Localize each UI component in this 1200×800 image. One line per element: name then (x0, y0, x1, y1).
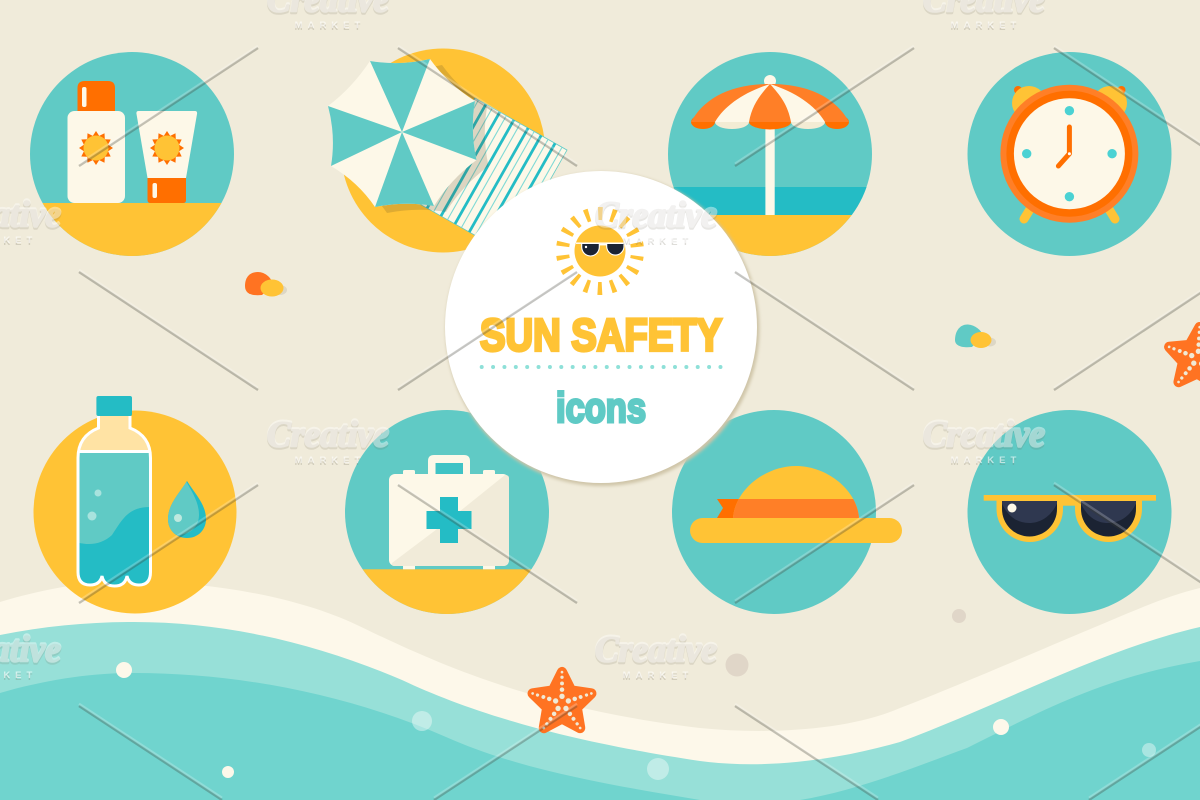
watermark marks: MARKET (951, 20, 1021, 31)
circle backdrop (30, 52, 234, 256)
sand strip (362, 569, 532, 614)
panel: water bottle (34, 396, 236, 614)
watermark marks (0, 0, 1045, 681)
first aid case (389, 455, 509, 569)
sea and sand (674, 187, 866, 256)
title: SUN SAFETY (480, 310, 722, 360)
subtitle: icons (556, 384, 646, 431)
watermark marks: Creative (923, 413, 1045, 455)
umbrella pole (765, 125, 775, 215)
clock face (1000, 85, 1138, 223)
parasol canopy (328, 59, 476, 207)
water bubbles (116, 662, 1156, 780)
circle backdrop (968, 52, 1172, 256)
watermark marks: MARKET (951, 455, 1021, 466)
right lens (1081, 501, 1136, 536)
watermark marks: MARKET (623, 235, 693, 246)
watermark marks: Creative (595, 193, 717, 235)
circle backdrop (345, 410, 549, 614)
circle backdrop (668, 52, 872, 256)
icon: sun with sunglasses (557, 208, 643, 294)
hat crown (733, 466, 859, 518)
panel: sunglasses (968, 410, 1172, 614)
panel: alarm clock (968, 52, 1172, 256)
watermark marks: Creative (595, 628, 717, 670)
icon: starfish bottom (531, 671, 593, 731)
badge disc (445, 171, 757, 483)
badge shadow (446, 172, 760, 486)
water drop (167, 481, 206, 538)
shoreline foam wave (0, 581, 1200, 800)
watermark marks: MARKET (295, 20, 365, 31)
panel: central title badge (445, 171, 760, 486)
panel: first aid kit (345, 410, 549, 615)
panel: sun hat (672, 410, 902, 614)
sand strip (42, 203, 222, 256)
watermark marks: MARKET (623, 670, 693, 681)
panel: sunscreen (30, 52, 234, 256)
icon: teal shell (955, 324, 996, 348)
hat band (725, 499, 865, 518)
icon: starfish right (1165, 324, 1200, 387)
watermark marks: Creative (267, 413, 389, 455)
spray bottle (68, 81, 125, 203)
panel: beach umbrella (660, 52, 880, 260)
bottle (76, 396, 152, 588)
parasol shadow (340, 65, 488, 213)
watermark marks: MARKET (295, 455, 365, 466)
umbrella canopy (691, 75, 849, 130)
bells and legs (1012, 86, 1127, 219)
circle backdrop (341, 48, 545, 252)
striped towel (416, 98, 567, 254)
shallow water wave (0, 622, 1200, 800)
circle backdrop (672, 410, 876, 614)
hat brim (690, 518, 902, 543)
ribbon tail (717, 499, 745, 518)
circle backdrop (968, 410, 1172, 614)
dotted divider (482, 365, 720, 369)
deep water wave (0, 661, 1200, 800)
circle backdrop (34, 410, 236, 614)
left lens (1002, 501, 1057, 536)
glasses frame (984, 495, 1156, 542)
sand pebbles (726, 609, 966, 676)
panel: parasol and towel (328, 48, 567, 254)
lotion tube (136, 111, 197, 203)
icon: orange shell (245, 272, 287, 296)
